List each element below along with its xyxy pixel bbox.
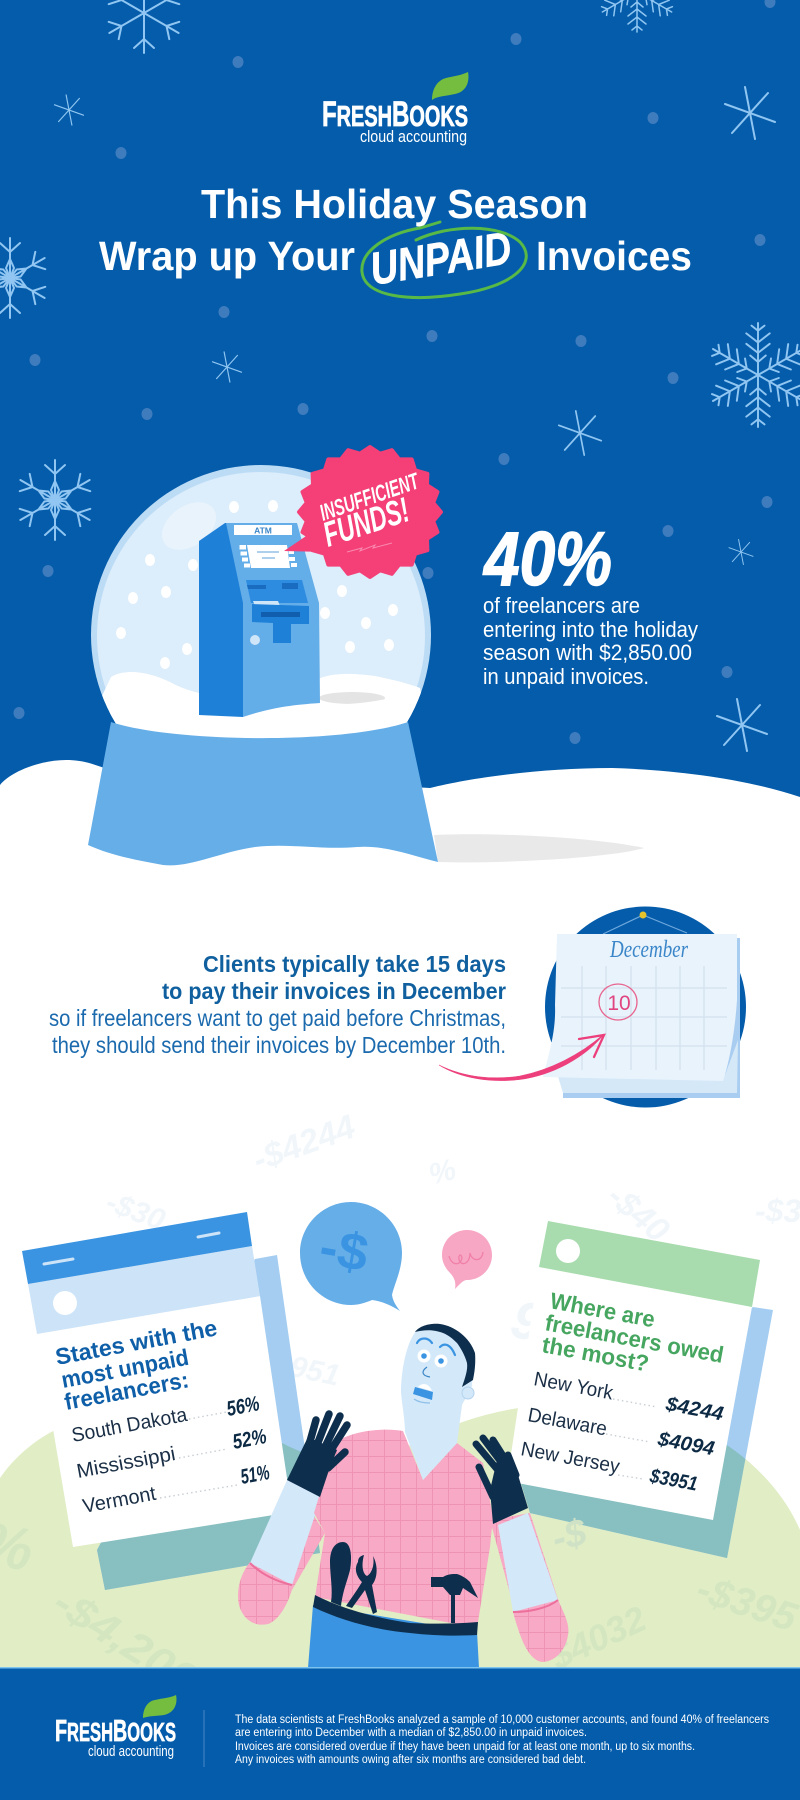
FreshBooks logo: FRESHBOOKS	[322, 95, 468, 134]
panel: where freelancers are owed the most: New York	[532, 1368, 616, 1405]
stat: 40%: of freelancers are	[483, 593, 640, 618]
faded background amounts on white: -$3	[755, 1193, 800, 1229]
panel: states with unpaid freelancers: most unpaid	[59, 1344, 191, 1393]
FreshBooks logo	[322, 72, 468, 146]
blue night sky background	[0, 0, 800, 800]
calendar: 10	[607, 992, 631, 1015]
speech bubble: worried squiggle	[442, 1230, 492, 1289]
ATM machine: ATM	[254, 526, 272, 536]
panel: states with unpaid freelancers: States with the	[53, 1314, 219, 1370]
globe snow drift	[102, 672, 421, 724]
panel: states with unpaid freelancers: freelancers:	[62, 1366, 191, 1415]
left glove	[287, 1414, 347, 1497]
panel: states with unpaid freelancers: Vermont	[81, 1483, 158, 1518]
text: December payment advice: to pay their invoices in December	[162, 978, 506, 1004]
stat: 40%: in unpaid invoices.	[483, 664, 649, 689]
stat: 40%: entering into the holiday	[483, 617, 698, 642]
panel: where freelancers are owed the most: freelancers owed	[543, 1309, 726, 1368]
footnote: Invoices are considered overdue if they have been unpaid for at least one month, up to six months.	[235, 1741, 695, 1753]
footer logo	[55, 1695, 176, 1760]
left sleeve	[238, 1478, 325, 1625]
calendar: December	[609, 937, 689, 963]
worried freelancer	[238, 1324, 568, 1668]
text: December payment advice	[49, 951, 506, 1058]
base shadow	[434, 834, 644, 862]
faded background amounts on white	[102, 1108, 800, 1393]
faint minus dollar on hill: -$	[547, 1511, 592, 1561]
globe snow flakes	[116, 500, 398, 669]
faded background amounts on hills	[0, 1509, 800, 1702]
panel: states with unpaid freelancers: 51%	[239, 1461, 272, 1489]
panel: where freelancers are owed the most: $4244	[663, 1393, 725, 1425]
plaid sweater	[314, 1430, 493, 1628]
belt	[313, 1595, 478, 1636]
speech bubble: minus dollar: -$	[315, 1218, 373, 1284]
faded background amounts on white: 3951	[271, 1347, 343, 1393]
snow globe with ATM	[88, 465, 438, 865]
globe base	[88, 722, 438, 865]
panel: where freelancers are owed the most: Delaware	[526, 1404, 609, 1440]
panel: states with unpaid freelancers: 52%	[231, 1425, 269, 1454]
hair	[415, 1324, 475, 1387]
ATM machine	[199, 523, 320, 717]
panel: states with unpaid freelancers: South Dakota	[70, 1404, 190, 1447]
arrow to calendar date	[439, 1034, 604, 1081]
panel: states with unpaid freelancers: Mississippi	[75, 1443, 177, 1483]
title: UNPAID	[366, 221, 515, 295]
pants	[308, 1605, 479, 1668]
panel: where freelancers are owed the most: $4094	[655, 1428, 716, 1460]
right glove	[476, 1438, 528, 1524]
panel: where freelancers are owed the most: Where are	[548, 1287, 657, 1332]
panel: where freelancers are owed the most: New Jersey	[519, 1438, 621, 1478]
panel: where freelancers are owed the most	[507, 1221, 773, 1558]
callout: insufficient funds	[284, 447, 441, 577]
footer logo: cloud accounting	[88, 1743, 174, 1760]
snowflakes	[0, 0, 800, 751]
faded background amounts on white: %	[425, 1153, 460, 1192]
footer	[0, 1667, 800, 1800]
snow ground	[0, 760, 800, 1000]
faded background amounts on white: -$4244	[248, 1108, 360, 1180]
faded background amounts on white: -$30	[102, 1186, 170, 1237]
text: December payment advice: Clients typically take 15 days	[203, 951, 506, 977]
title: This Holiday Season	[201, 181, 588, 227]
snow in front of ATM	[109, 693, 421, 724]
stat: 40%	[482, 517, 698, 689]
text: December payment advice: so if freelancers want to get paid before Christmas,	[49, 1005, 506, 1031]
stat: 40%: season with $2,850.00	[483, 640, 692, 665]
text: December payment advice: they should send their invoices by December 10th.	[52, 1032, 506, 1058]
ear	[462, 1387, 474, 1399]
faded background amounts on white: 9	[505, 1289, 549, 1354]
panel: states with unpaid freelancers: 56%	[225, 1392, 262, 1421]
callout: insufficient funds: INSUFFICIENT	[316, 467, 423, 526]
title	[99, 181, 692, 298]
footer logo: FRESHBOOKS	[55, 1713, 176, 1748]
neck and head	[401, 1330, 473, 1480]
footnote: Any invoices with amounts owing after six months are considered bad debt.	[235, 1754, 586, 1766]
right sleeve	[490, 1513, 568, 1662]
footnote: are entering into December with a median of $2,850.00 in unpaid invoices.	[235, 1727, 587, 1739]
title: Invoices	[536, 233, 692, 279]
calendar	[439, 906, 746, 1108]
footnote	[235, 1714, 769, 1766]
faded background amounts on white: -$40	[600, 1177, 676, 1250]
falling snow dots	[14, 0, 776, 744]
face	[413, 1338, 455, 1403]
FreshBooks logo: cloud accounting	[360, 127, 467, 146]
panel: where freelancers are owed the most: $3951	[647, 1465, 699, 1496]
faded background amounts on hills: -$395	[691, 1567, 800, 1640]
stat: 40%: 40%	[482, 517, 612, 602]
callout: insufficient funds: FUNDS!	[318, 490, 414, 555]
tools	[330, 1542, 478, 1623]
panel: where freelancers are owed the most: the most?	[540, 1331, 651, 1377]
faded background amounts on hills: $4032	[543, 1598, 652, 1678]
footnote: The data scientists at FreshBooks analyzed a sample of 10,000 customer accounts, and found 40% of freelancers	[235, 1714, 769, 1726]
title: Wrap up Your	[99, 233, 355, 279]
green hills	[0, 1403, 800, 1668]
panel: states with unpaid freelancers	[22, 1212, 320, 1590]
speech bubble: minus dollar	[300, 1202, 402, 1311]
faded background amounts on hills: -$4,200	[45, 1578, 206, 1702]
